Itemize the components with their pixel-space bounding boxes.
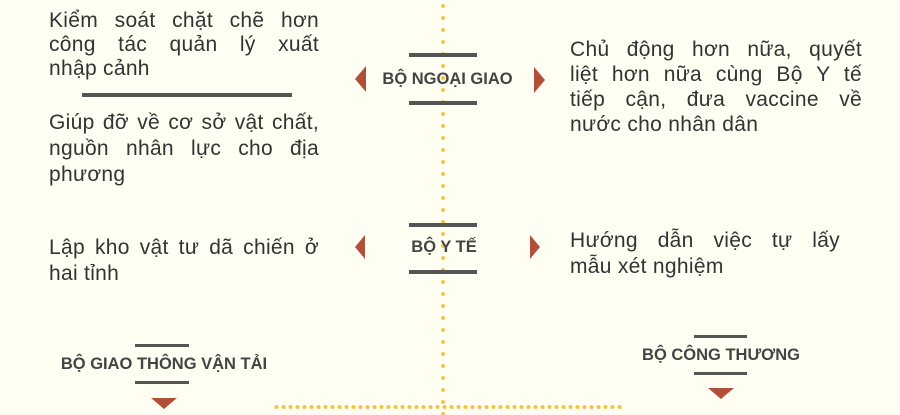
text: left 2: phương (49, 163, 125, 186)
text: right 1 (570, 38, 862, 136)
text: right 1: Chủ động hơn nữa, quyết (570, 38, 862, 61)
label: Bộ Y tế: BỘ Y TẾ (411, 238, 477, 256)
text: right 1: liệt hơn nữa cùng Bộ Y tế (570, 63, 862, 86)
icon: arrow left 1 (355, 66, 366, 92)
label: Bộ Y tế (409, 223, 477, 274)
text: left 2 (49, 111, 319, 186)
label: Bộ Ngoại giao (382, 53, 513, 105)
icon: arrow left 2 (355, 235, 365, 259)
text: left 2: Giúp đỡ về cơ sở vật chất, (49, 111, 319, 134)
text: left 1: công tác quản lý xuất (49, 33, 319, 56)
label: Bộ Giao thông Vận tải (61, 344, 267, 409)
icon: arrow right 1 (534, 67, 545, 93)
text: left 1: nhập cảnh (49, 57, 150, 80)
text: right 2 (570, 228, 840, 278)
text: left 3: Lập kho vật tư dã chiến ở (49, 236, 319, 259)
text: right 1: tiếp cận, đưa vaccine về (570, 88, 862, 111)
text: right 2: Hướng dẫn việc tự lấy (570, 229, 840, 252)
text: left 1: Kiểm soát chặt chẽ hơn (49, 9, 319, 32)
text: left 2: nguồn nhân lực cho địa (49, 137, 319, 160)
text: right 2: mẫu xét nghiệm (570, 255, 724, 278)
label: Bộ Công Thương: BỘ CÔNG THƯƠNG (642, 346, 800, 364)
text: left 3: hai tỉnh (49, 262, 119, 285)
icon: arrow right 2 (530, 235, 540, 259)
label: Bộ Giao thông Vận tải: BỘ GIAO THÔNG VẬN TẢI (61, 355, 267, 373)
label: Bộ Ngoại giao: BỘ NGOẠI GIAO (382, 70, 513, 88)
label: Bộ Công Thương (642, 335, 800, 399)
text: right 1: nước cho nhân dân (570, 113, 758, 136)
text: left 3 (49, 236, 319, 285)
text: left 1 (49, 9, 319, 80)
